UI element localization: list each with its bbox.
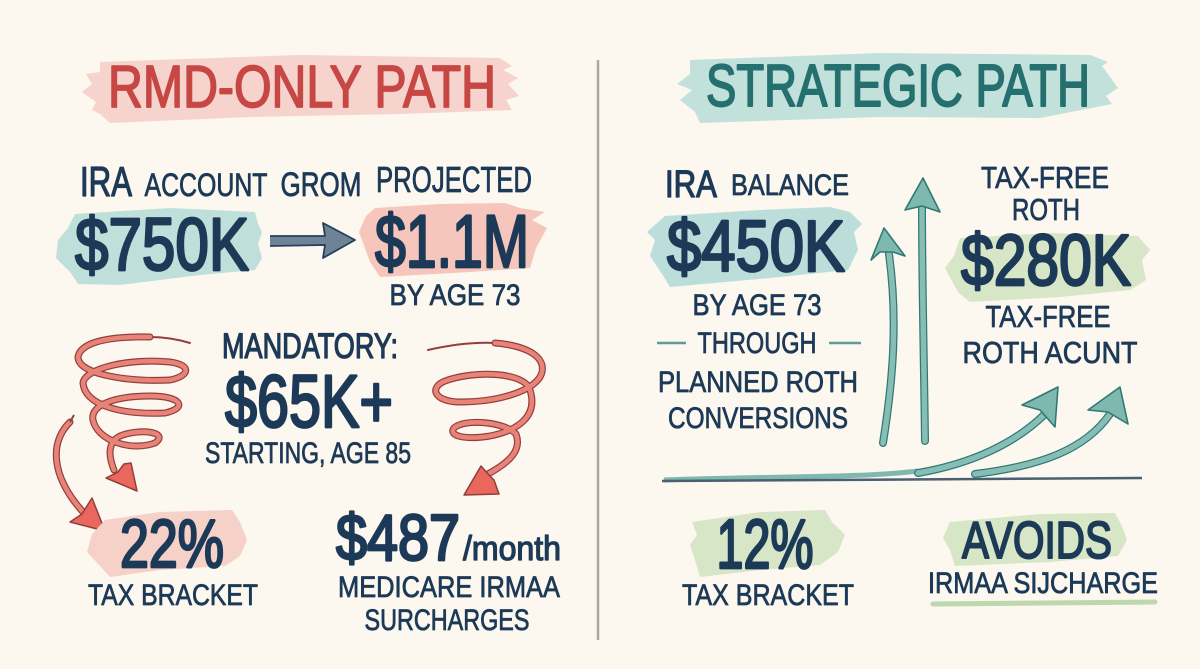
value: avoids IRMAA surcharge: IRMAA SIJCHARGE <box>928 567 1158 600</box>
text: IRA account grom projected <box>80 158 532 205</box>
value: $280K: $280K <box>961 221 1131 301</box>
text: starting, age 85: STARTING, AGE 85 <box>205 437 411 470</box>
value: 22% tax bracket <box>87 506 258 612</box>
text: by age 73 through planned Roth conversions: THROUGH <box>698 327 816 360</box>
text: IRA account grom projected: GROM <box>280 166 362 204</box>
text: tax-free Roth acunt: TAX-FREE <box>986 299 1110 334</box>
value: $65K+: $65K+ <box>225 360 393 443</box>
value: 12% tax bracket: TAX BRACKET <box>682 579 854 612</box>
value: 12% tax bracket: 12% <box>716 505 814 583</box>
text: tax-free Roth acunt <box>962 299 1138 370</box>
text: tax-free Roth <box>981 160 1109 227</box>
text: by age 73 through planned Roth conversions: BY AGE 73 <box>692 289 822 322</box>
panel: RMD-only path <box>56 54 561 637</box>
icon: left spiral with arrows <box>56 337 190 531</box>
value: $487/month Medicare IRMAA surcharges: SURCHARGES <box>364 604 530 637</box>
value: $750K: $750K <box>75 203 249 286</box>
value: $487/month Medicare IRMAA surcharges: /month <box>463 530 561 568</box>
value: $487/month Medicare IRMAA surcharges: $487 <box>336 501 460 574</box>
text: IRA balance: BALANCE <box>731 169 849 202</box>
text: IRA account grom projected: ACCOUNT <box>144 167 268 203</box>
value: $487/month Medicare IRMAA surcharges <box>336 501 561 637</box>
value: 22% tax bracket: TAX BRACKET <box>88 579 258 612</box>
text: IRA account grom projected: PROJECTED <box>376 159 532 200</box>
value: $450K: $450K <box>667 207 845 287</box>
text: IRA balance <box>665 164 849 206</box>
text: by age 73 through planned Roth conversions: CONVERSIONS <box>668 402 848 435</box>
value: avoids IRMAA surcharge: AVOIDS <box>962 512 1112 570</box>
value: $487/month Medicare IRMAA surcharges: MEDICARE IRMAA <box>338 571 560 604</box>
value: avoids IRMAA surcharge <box>928 512 1158 604</box>
text: mandatory: MANDATORY: <box>222 327 398 366</box>
text: tax-free Roth: ROTH <box>1012 192 1080 227</box>
arrow: growth to $1.1M <box>270 223 355 258</box>
text: by age 73 through planned Roth conversions: PLANNED ROTH <box>658 366 858 399</box>
text: by age 73 through planned Roth conversions <box>657 289 861 435</box>
value: 22% tax bracket: 22% <box>120 506 224 582</box>
heading: RMD-only path: RMD-ONLY PATH <box>108 54 496 120</box>
panel: strategic path <box>647 53 1158 612</box>
text: IRA account grom projected: IRA <box>80 158 132 205</box>
heading: strategic path: STRATEGIC PATH <box>706 53 1090 119</box>
text: IRA balance: IRA <box>665 164 718 206</box>
text: by age 73: BY AGE 73 <box>390 279 520 312</box>
value: 12% tax bracket <box>682 505 854 612</box>
value: $1.1M: $1.1M <box>375 200 529 283</box>
text: tax-free Roth: TAX-FREE <box>981 160 1109 195</box>
text: tax-free Roth acunt: ROTH ACUNT <box>962 335 1138 370</box>
icon: right spiral with arrow <box>428 343 542 495</box>
chart: upward arrows <box>662 178 1142 481</box>
